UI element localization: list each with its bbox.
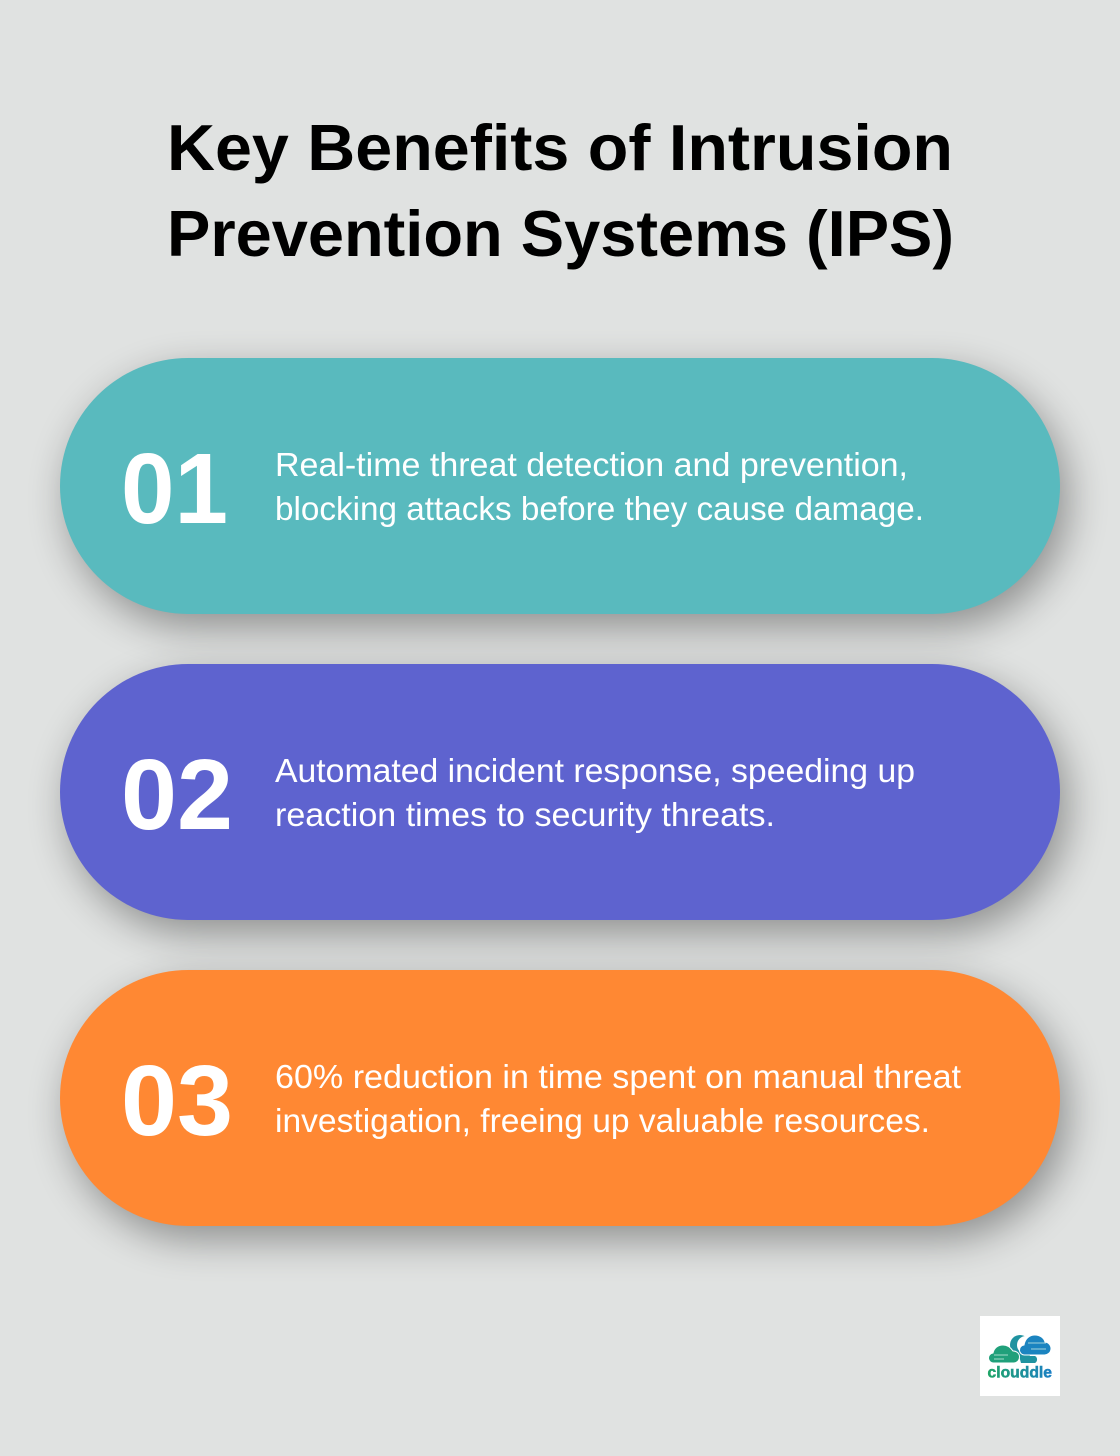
- panel: benefit 03: [60, 970, 1068, 1240]
- crescent cloud: [1010, 1335, 1032, 1359]
- panel: benefit 02: [60, 664, 1068, 934]
- number 01: 01: [121, 433, 228, 545]
- panel: benefit 01: [60, 358, 1068, 628]
- title: [167, 111, 954, 270]
- text: benefit 03: investigation, freeing up valuable resources.: [275, 1103, 930, 1140]
- logo: clouddle: [980, 1316, 1060, 1396]
- logo wordmark: clouddle: [988, 1364, 1052, 1382]
- text: benefit 01: Real-time threat detection and prevention,: [275, 447, 908, 484]
- number 03: 03: [121, 1045, 233, 1157]
- text: benefit 02: [275, 753, 915, 834]
- left cloud: [988, 1345, 1020, 1363]
- text: benefit 03: [275, 1059, 962, 1140]
- text: benefit 03: 60% reduction in time spent on manual threat: [275, 1059, 962, 1096]
- text: benefit 01: blocking attacks before they cause damage.: [275, 491, 924, 528]
- title: Prevention Systems (IPS): [167, 197, 954, 270]
- number 02: 02: [121, 739, 233, 851]
- text: benefit 02: reaction times to security threats.: [275, 797, 775, 834]
- text: benefit 01: [275, 447, 924, 528]
- text: benefit 02: Automated incident response, speeding up: [275, 753, 915, 790]
- title: Key Benefits of Intrusion: [167, 111, 953, 184]
- icon: clouds: [988, 1335, 1051, 1363]
- right cloud: [1019, 1335, 1051, 1355]
